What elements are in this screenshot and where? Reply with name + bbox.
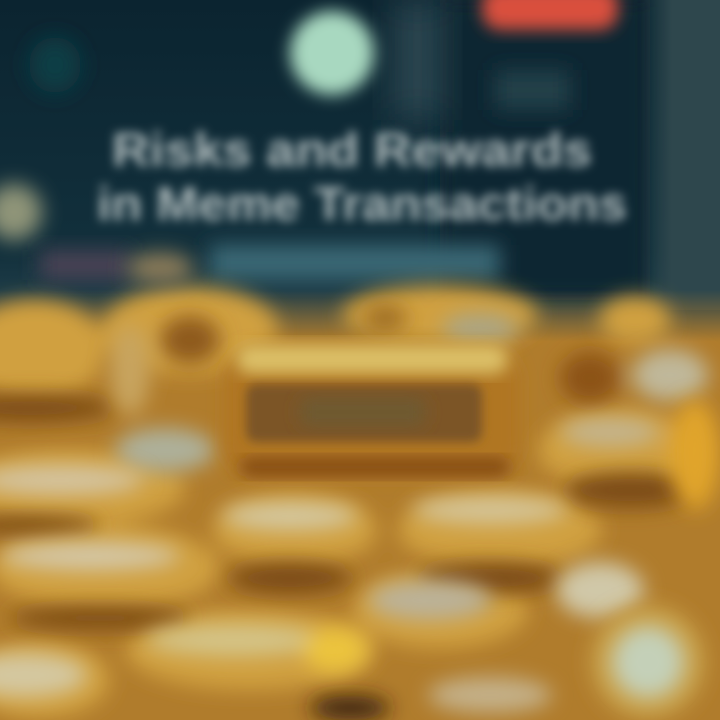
glowing mint circle xyxy=(290,11,374,95)
gold tablet bodies xyxy=(0,285,702,718)
pile of gold tablets xyxy=(0,252,720,720)
red rounded badge xyxy=(482,0,618,30)
gold base layer xyxy=(0,290,720,720)
title: Risks and Rewards xyxy=(112,123,592,176)
title xyxy=(97,123,627,230)
title: in Meme Transactions xyxy=(97,177,627,230)
dark shadows between tablets xyxy=(0,394,695,720)
pale coin, lower right xyxy=(591,605,705,719)
pale gold coin at left edge xyxy=(0,184,42,240)
central gold tablet xyxy=(224,344,520,478)
pale tablet tops xyxy=(0,400,720,713)
back row tablets xyxy=(110,252,708,472)
